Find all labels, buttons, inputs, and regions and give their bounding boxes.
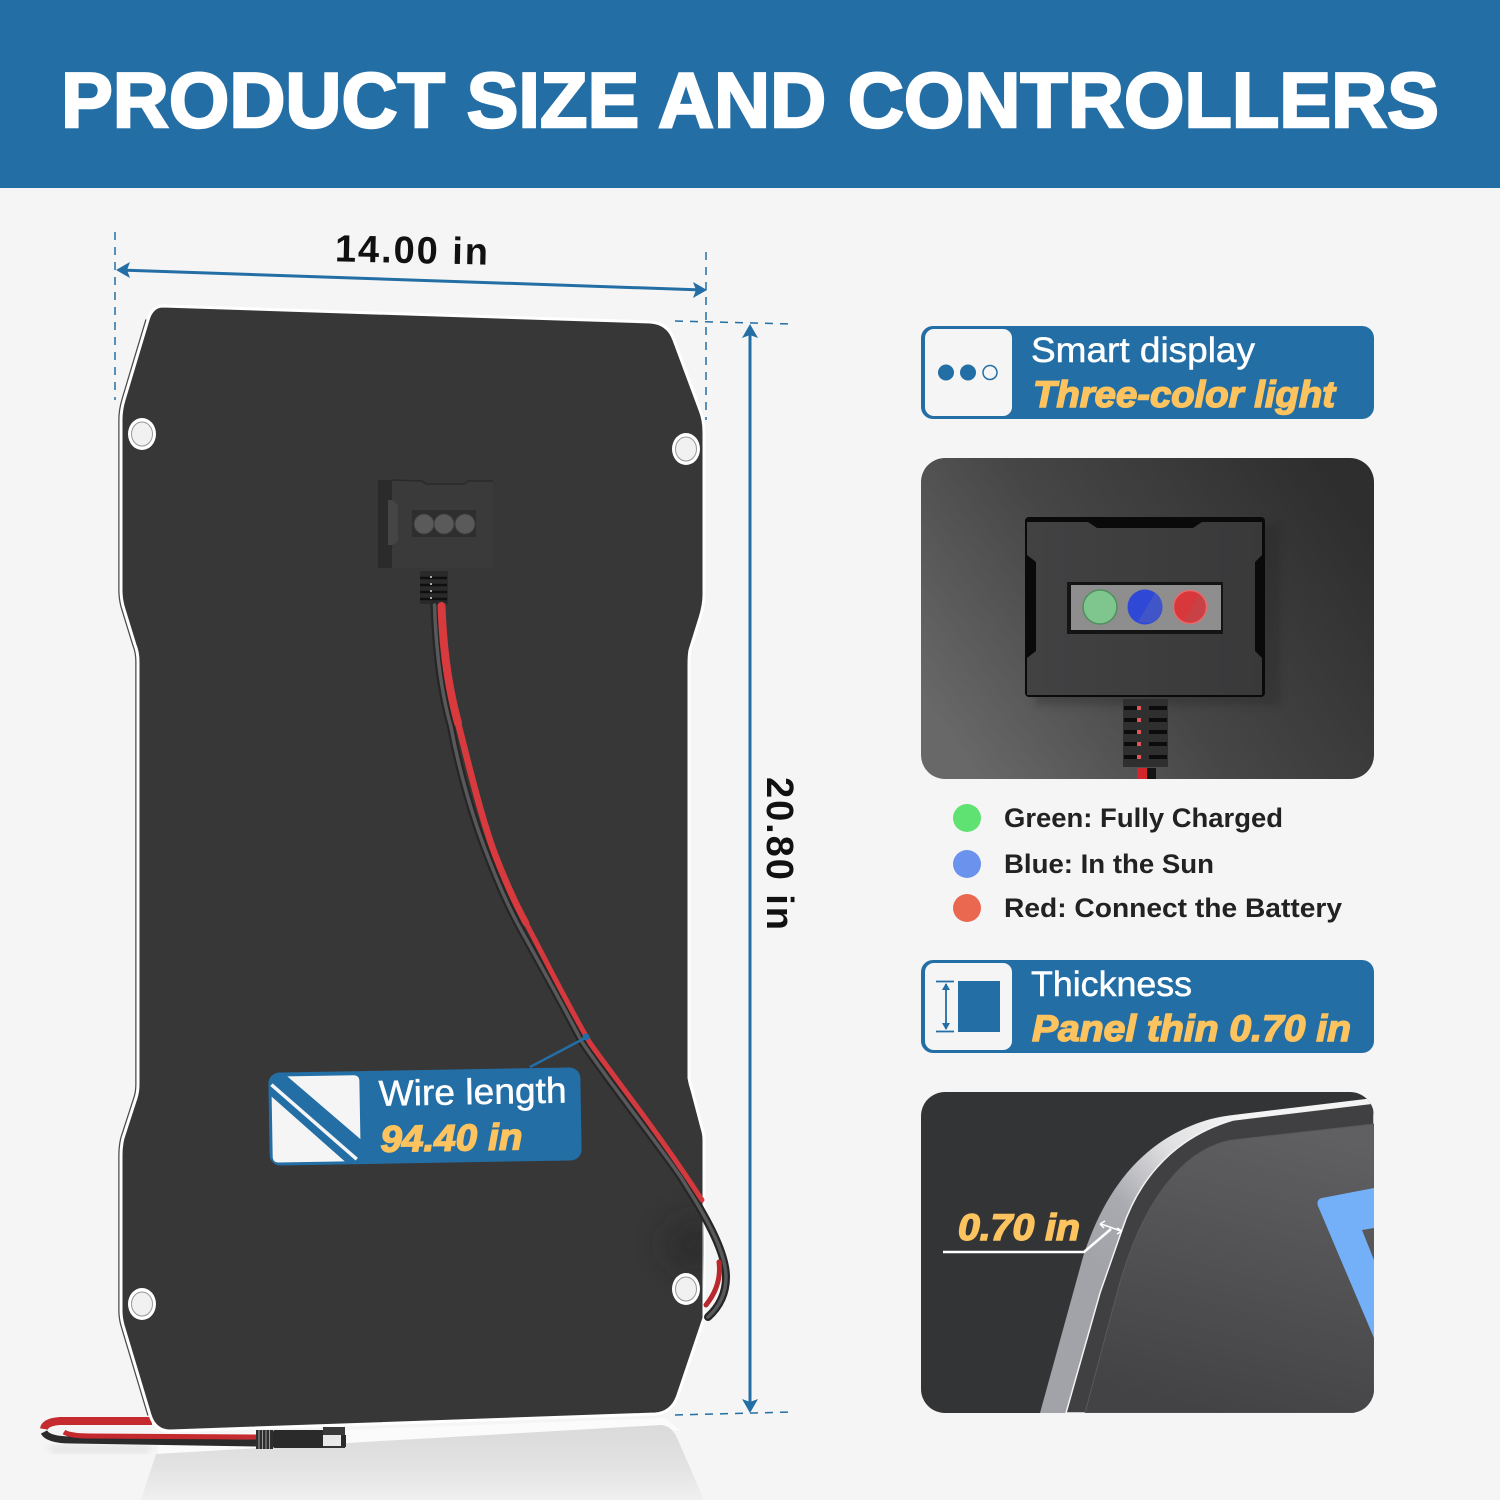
cable on panel bbox=[434, 605, 726, 1317]
height dimension bbox=[675, 321, 800, 1415]
panel inner surface bbox=[1085, 1124, 1374, 1413]
solar panel back bbox=[121, 306, 725, 1431]
mini controller on panel bbox=[378, 480, 493, 604]
icon: three dots bbox=[925, 329, 1012, 416]
legend: LED meanings bbox=[953, 803, 1342, 923]
thickness leader line bbox=[943, 1221, 1122, 1252]
title: PRODUCT SIZE AND CONTROLLERS bbox=[61, 56, 1439, 144]
legend blue: Blue: In the Sun bbox=[1004, 849, 1214, 879]
wire length text: Wire length bbox=[378, 1070, 567, 1114]
title banner bbox=[0, 0, 1500, 188]
badge: thickness bbox=[921, 960, 1374, 1053]
panel: LED controller close-up bbox=[921, 458, 1374, 779]
bottom cable and connector bbox=[44, 1427, 346, 1449]
badge: smart display bbox=[921, 326, 1374, 419]
badge value: Three-color light bbox=[1033, 374, 1337, 415]
bottom cable strand behind panel bbox=[44, 1421, 152, 1429]
panel edge band bbox=[1040, 1098, 1374, 1413]
LED green bbox=[1083, 590, 1117, 624]
panel: thickness close-up bbox=[921, 1092, 1374, 1413]
rivet top left bbox=[128, 418, 156, 450]
wire length callout bbox=[268, 1034, 590, 1166]
badge value: Panel thin 0.70 in bbox=[1032, 1008, 1351, 1049]
legend red: Red: Connect the Battery bbox=[1004, 893, 1342, 923]
LED red bbox=[1174, 590, 1206, 624]
controller body bbox=[1025, 517, 1280, 705]
thickness value: 0.70 in bbox=[958, 1207, 1080, 1248]
badge heading: Thickness bbox=[1031, 965, 1192, 1004]
height label: 20.80 in bbox=[758, 777, 800, 930]
width label: 14.00 in bbox=[335, 228, 488, 274]
legend green: Green: Fully Charged bbox=[1004, 803, 1283, 833]
wire length value: 94.40 in bbox=[380, 1116, 523, 1160]
strain relief and wires bbox=[1123, 699, 1168, 779]
blue logo fragment bbox=[1318, 1188, 1374, 1338]
icon: thickness square bbox=[925, 963, 1012, 1050]
floor reflection of panel bbox=[50, 1418, 704, 1500]
rivet top right bbox=[672, 433, 700, 465]
panel dark border bbox=[1066, 1103, 1374, 1413]
icon: wire bbox=[271, 1075, 361, 1163]
rivet bottom right bbox=[672, 1273, 700, 1305]
badge heading: Smart display bbox=[1031, 331, 1256, 370]
width dimension bbox=[115, 228, 707, 420]
LED blue bbox=[1128, 590, 1162, 624]
rivet bottom left bbox=[128, 1288, 156, 1320]
